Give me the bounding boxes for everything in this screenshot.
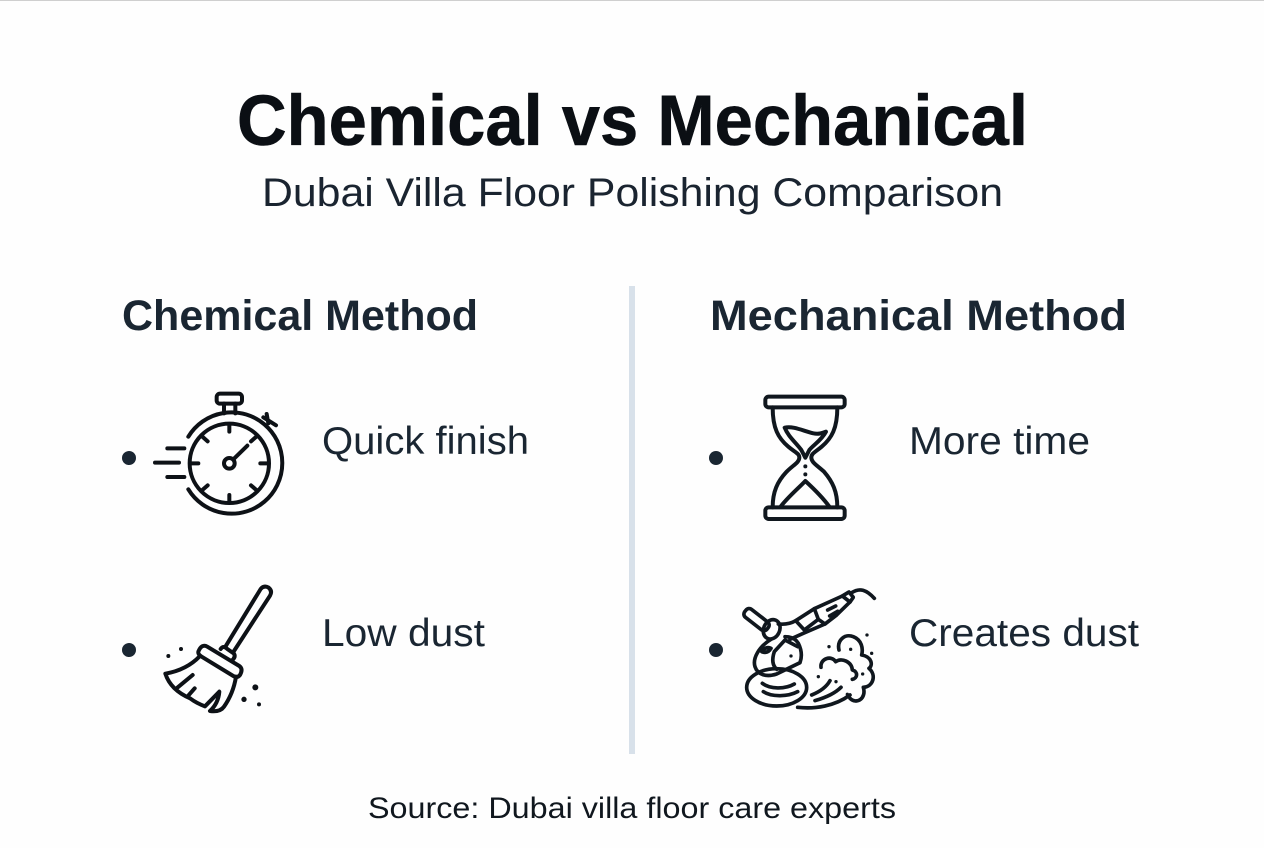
icon: stopwatch	[155, 394, 282, 514]
label: more time: More time	[909, 420, 1090, 463]
bullet: quick finish	[122, 451, 136, 465]
heading: mechanical method: Mechanical Method	[710, 292, 1127, 340]
title: Chemical vs Mechanical	[237, 82, 1028, 161]
icon: angle grinder with dust cloud	[742, 590, 874, 708]
label: quick finish: Quick finish	[322, 420, 529, 463]
label: creates dust: Creates dust	[909, 612, 1139, 655]
source note: Source: Dubai villa floor care experts	[368, 792, 896, 825]
bullet: more time	[709, 451, 723, 465]
heading: chemical method: Chemical Method	[122, 292, 478, 340]
subtitle: Dubai Villa Floor Polishing Comparison	[262, 171, 1003, 215]
label: low dust: Low dust	[322, 612, 485, 655]
icon: hourglass	[765, 397, 845, 519]
column divider	[629, 286, 635, 754]
icon: broom	[165, 587, 271, 711]
bullet: low dust	[122, 643, 136, 657]
bullet: creates dust	[709, 643, 723, 657]
